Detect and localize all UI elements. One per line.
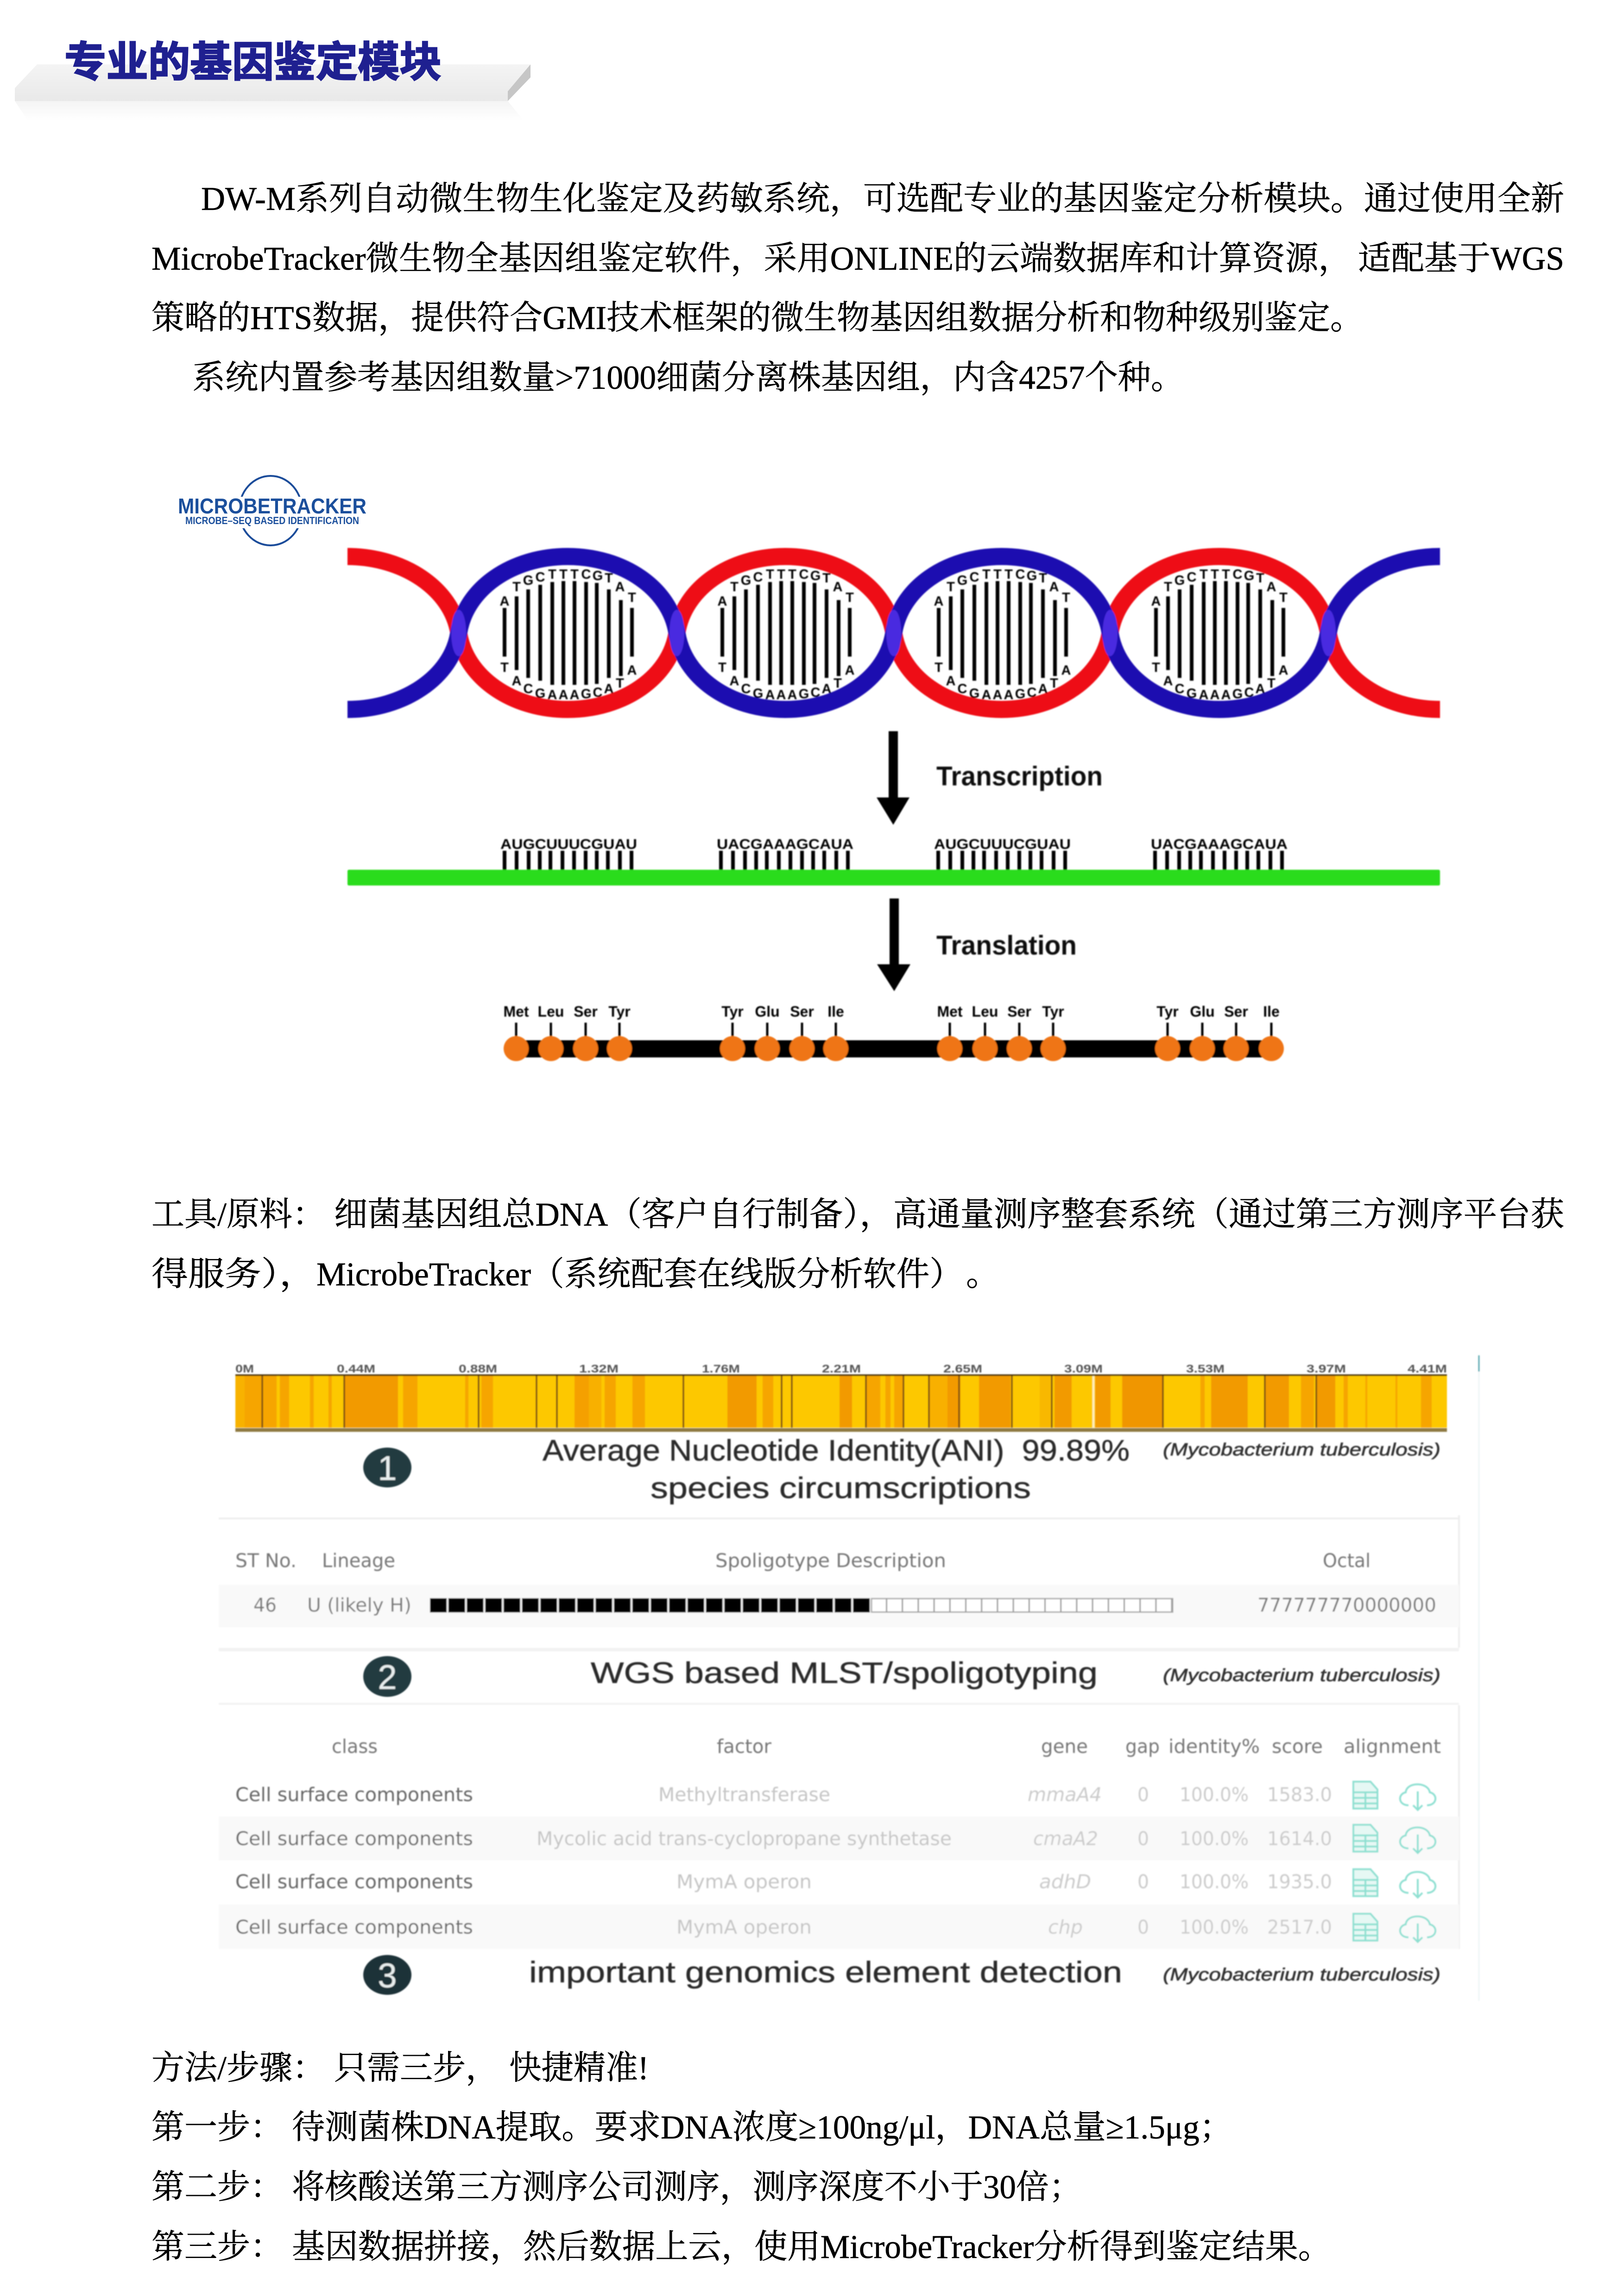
base pairs loop 2: TACGAAAGCATA [718,660,855,702]
row 2: Mycolic acid trans-cyclopropane synthetase [537,1828,952,1850]
ANI genome track: 2.65M [943,1363,982,1375]
title banner: 专业的基因鉴定模块 [64,39,442,86]
badge 3 [363,1955,411,1995]
protein chain: Ser [1007,1003,1031,1020]
icon: document and cloud row 1 [1353,1782,1435,1810]
method steps: 将核酸送第三方测序公司测序，测序深度不小于30倍； [292,2169,1082,2206]
protein chain: Ser [1224,1003,1248,1020]
table: virulence factors: identity% [1168,1735,1260,1758]
intro paragraph: DW-M系列自动微生物生化鉴定及药敏系统，可选配专业的基因鉴定分析模块。通过使用全新 [201,180,1564,217]
method steps: 第二步： [152,2169,283,2206]
table: spoligotype: Octal [1323,1550,1370,1572]
method steps: 第三步： [152,2228,283,2265]
caption: ANI [543,1434,1440,1505]
DNA double helix [347,557,1440,709]
ANI genome track: 0.44M [337,1363,375,1375]
table: virulence factors: score [1272,1735,1323,1758]
base pairs loop 1: ATGCTTTCGTAT [500,567,636,609]
table: virulence factors: gene [1041,1735,1088,1758]
row 3 [235,1871,1332,1893]
intro paragraph: 系统内置参考基因组数量>71000细菌分离株基因组，内含4257个种。 [192,359,1184,396]
caption: genomics elements: important genomics element detection [529,1955,1122,1989]
table: spoligotype [219,1550,1459,1627]
table: spoligotype: 777777770000000 [1257,1594,1436,1616]
row 2 [235,1828,1332,1850]
method steps: 待测菌株DNA提取。要求DNA浓度≥100ng/μl，DNA总量≥1.5μg； [292,2109,1232,2146]
protein chain: Ser [574,1003,598,1020]
protein chain: Met [937,1003,963,1020]
row 3: 1935.0 [1267,1871,1332,1893]
base pairs loop 4: ATGCTTTCGTAT [1151,567,1288,609]
table: virulence factors [219,1735,1459,1949]
table: spoligotype: 46 [253,1594,277,1616]
protein chain: Ser [790,1003,814,1020]
caption: MLST: (Mycobacterium tuberculosis) [1163,1666,1440,1685]
mRNA strand: AUGCUUUCGUAU [934,836,1071,852]
base pairs loop 3: TACGAAAGCATA [935,660,1071,702]
base pairs loop 4: TACGAAAGCATA [1152,660,1288,702]
row 3: Cell surface components [235,1871,473,1893]
row 1: Methyltransferase [658,1784,830,1806]
badge 3: 3 [378,1956,397,1995]
caption: MLST [591,1656,1440,1689]
intro paragraph: MicrobeTracker微生物全基因组鉴定软件，采用ONLINE的云端数据库和计算资源， [152,240,1351,277]
arrow: transcription [877,731,909,825]
caption: genomics elements: (Mycobacterium tuberculosis) [1163,1965,1440,1985]
base pairs loop 2: ATGCTTTCGTAT [718,567,854,609]
table: spoligotype: ST No. [235,1550,297,1572]
row 3: adhD [1039,1871,1091,1893]
logo: MicrobeTracker: MICROBE–SEQ BASED IDENTIFICATION [185,515,359,526]
ANI genome track: 4.41M [1408,1363,1447,1375]
table: spoligotype: Spoligotype Description [715,1550,946,1572]
protein chain: Tyr [1156,1003,1179,1020]
intro paragraph [152,180,1564,396]
method steps: 快捷精准! [509,2049,649,2087]
caption: MLST: WGS based MLST/spoligotyping [591,1656,1098,1689]
protein chain: Met [503,1003,529,1020]
protein chain: Leu [972,1003,998,1020]
base pairs loop 1 [500,567,637,702]
ANI genome track: 1.76M [702,1363,740,1375]
table: spoligotype: U (likely H) [307,1594,411,1616]
row 2: Cell surface components [235,1828,473,1850]
icon: document and cloud row 3 [1353,1869,1435,1898]
badge 2: 2 [378,1658,397,1696]
materials paragraph: 。 [966,1256,999,1293]
caption: genomics elements [529,1955,1440,1989]
row 4: chp [1048,1916,1083,1938]
table: virulence factors: factor [717,1735,771,1758]
panel: genome analysis screenshot [219,1355,1479,2001]
icon: document and cloud row 2 [1353,1825,1435,1853]
ANI genome track: 2.21M [822,1363,861,1375]
materials paragraph [152,1196,1564,1293]
ANI genome track: 1.32M [579,1363,619,1375]
row 2: 100.0% [1180,1828,1249,1850]
mRNA strand [347,836,1440,886]
ANI genome track: 0M [235,1363,254,1375]
protein chain: Ile [1263,1003,1280,1020]
row 3: 0 [1137,1871,1149,1893]
table: virulence factors: gap [1125,1735,1160,1758]
row 2: 0 [1137,1828,1149,1850]
protein chain: Tyr [721,1003,744,1020]
protein chain [503,1003,1284,1061]
row 4: 2517.0 [1267,1916,1332,1938]
base pairs loop 4 [1151,567,1288,702]
badge 1: 1 [378,1449,397,1487]
caption: ANI: (Mycobacterium tuberculosis) [1163,1440,1440,1460]
intro paragraph: 适配基于WGS [1358,240,1564,277]
row 4 [235,1916,1332,1938]
row 4: MymA operon [676,1916,812,1938]
ANI genome track: 0.88M [459,1363,497,1375]
arrow: translation [877,898,910,991]
row 3: 100.0% [1180,1871,1249,1893]
materials paragraph: 工具/原料： [152,1196,325,1233]
base pairs loop 1: TACGAAAGCATA [500,660,637,702]
protein chain: Ile [827,1003,844,1020]
logo: MicrobeTracker [171,476,375,545]
badge 2 [363,1656,411,1697]
intro paragraph: 策略的HTS数据，提供符合GMI技术框架的微生物基因组数据分析和物种级别鉴定。 [152,299,1363,336]
base pairs loop 3: ATGCTTTCGTAT [934,567,1070,609]
row 4: 0 [1137,1916,1149,1938]
row 1: 100.0% [1180,1784,1249,1806]
title banner [15,39,530,120]
materials paragraph: 得服务）， [152,1256,316,1293]
method steps: 方法/步骤： [152,2049,325,2087]
spoligotype pattern [430,1599,1173,1612]
protein chain: Leu [538,1003,564,1020]
ANI genome track [235,1363,1447,1432]
protein chain: Glu [1190,1003,1215,1020]
ANI genome track: 3.53M [1186,1363,1225,1375]
row 4: 100.0% [1180,1916,1249,1938]
table: spoligotype: Lineage [322,1550,395,1572]
caption: ANI: Average Nucleotide Identity(ANI) 99.89% [543,1434,1130,1467]
panel frame lines [219,1355,1479,2001]
method steps: 基因数据拼接，然后数据上云，使用MicrobeTracker分析得到鉴定结果。 [292,2228,1331,2265]
mRNA strand: UACGAAAGCAUA [717,836,853,852]
table: virulence factors: class [332,1735,378,1758]
diagram: central dogma [347,557,1440,1061]
row 3: MymA operon [676,1871,812,1893]
materials paragraph: MicrobeTracker（系统配套在线版分析软件） [316,1256,963,1293]
table: virulence factors: alignment [1344,1735,1441,1758]
method steps: 第一步： [152,2109,283,2146]
method steps: 只需三步， [334,2049,499,2087]
mRNA strand: AUGCUUUCGUAU [500,836,637,852]
row 2: cmaA2 [1033,1828,1098,1850]
base pairs loop 3 [934,567,1071,702]
label: translation: Translation [936,930,1077,961]
protein chain: Tyr [608,1003,631,1020]
row 1: 1583.0 [1267,1784,1332,1806]
row 1: Cell surface components [235,1784,473,1806]
protein chain: Tyr [1042,1003,1064,1020]
method steps [152,2049,1331,2265]
materials paragraph: 细菌基因组总DNA（客户自行制备），高通量测序整套系统（通过第三方测序平台获 [334,1196,1564,1233]
badge 1 [363,1448,411,1487]
logo: MicrobeTracker: MICROBETRACKER [178,494,366,518]
mRNA strand: UACGAAAGCAUA [1151,836,1288,852]
ANI genome track: 3.97M [1307,1363,1346,1375]
row 2: 1614.0 [1267,1828,1332,1850]
row 4: Cell surface components [235,1916,473,1938]
protein chain: Glu [755,1003,780,1020]
base pairs loop 2 [718,567,855,702]
row 1 [235,1784,1332,1806]
icon: document and cloud row 4 [1353,1914,1435,1942]
ANI genome track: 3.09M [1064,1363,1103,1375]
label: transcription: Transcription [936,761,1103,791]
caption: ANI: species circumscriptions [650,1471,1031,1505]
row 1: 0 [1137,1784,1149,1806]
row 1: mmaA4 [1028,1784,1102,1806]
